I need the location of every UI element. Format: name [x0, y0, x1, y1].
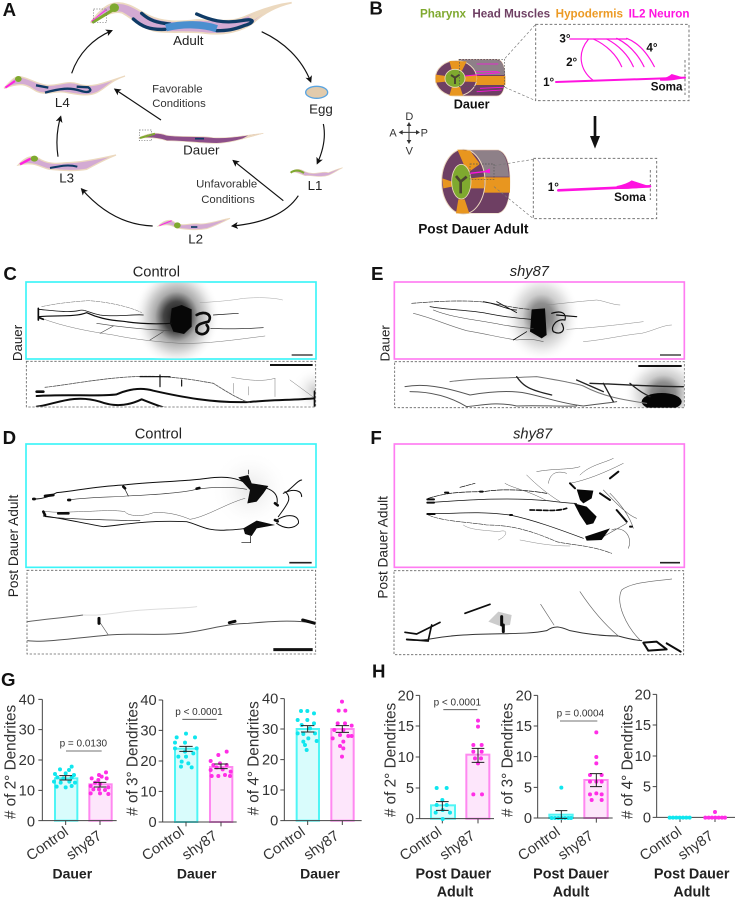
label: L2: L2: [188, 231, 203, 246]
legend: Hypodermis: [556, 8, 623, 21]
inset: dauer neuron: 4°: [646, 42, 658, 55]
label G: G: [1, 669, 16, 690]
worm: dauer: [138, 130, 263, 143]
chart: dauer 4° dendrites: Control: [260, 824, 308, 864]
heading: Control C: Control: [133, 265, 180, 281]
chart: dauer 2° dendrites: Control: [24, 824, 72, 864]
icon: dauer cylinder: [435, 59, 505, 96]
micrograph: control dauer: [25, 281, 317, 360]
chart: post dauer 4° dendrites: # of 4° Dendrites: [620, 704, 637, 819]
chart: dauer 2° dendrites: # of 2° Dendrites: [3, 704, 20, 819]
chart: dauer 2° dendrites: 40: [19, 692, 35, 708]
chart: post dauer 4° dendrites: [620, 687, 735, 899]
label: unfavorable conditions: Unfavorable: [196, 179, 257, 191]
label C: C: [3, 263, 17, 284]
chart: dauer 2° dendrites: 20: [19, 753, 35, 769]
chart: dauer 2° dendrites: 30: [19, 723, 35, 739]
inset: shy87 dauer: [394, 361, 685, 408]
chart: dauer 3° dendrites: p < 0.0001: [175, 707, 223, 718]
chart: dauer 3° dendrites: 40: [140, 693, 157, 709]
worm: L3: [18, 155, 116, 171]
chart: post dauer 3° dendrites: 0: [524, 811, 532, 827]
arrow: L2 to L3: [82, 189, 153, 226]
chart: post dauer 4° dendrites: shy87: [675, 828, 717, 864]
chart: dauer 4° dendrites: Dauer: [300, 866, 340, 882]
label E: E: [371, 263, 383, 284]
chart: post dauer 3° dendrites: p = 0.0004: [557, 709, 605, 720]
arrow: dauer to L4: [115, 89, 161, 120]
chart: post dauer 2° dendrites: # of 2° Dendrites: [382, 702, 399, 817]
label: Post Dauer Adult: Post Dauer Adult: [418, 222, 529, 237]
micrograph: control post dauer adult: [26, 444, 316, 567]
inset: post dauer neuron: 1°: [548, 181, 559, 194]
chart: post dauer 4° dendrites: Control: [637, 824, 685, 864]
inset: control post dauer adult: [27, 570, 316, 654]
chart: dauer 3° dendrites: 10: [140, 784, 157, 800]
panel H: post dauer adult charts: [372, 660, 735, 899]
arrow: L1 to L2: [232, 196, 298, 226]
label: L1: L1: [308, 178, 322, 193]
inset: dauer neuron: 2°: [566, 56, 578, 69]
chart: post dauer 2° dendrites: 20: [398, 688, 414, 704]
chart: post dauer 3° dendrites: [500, 688, 613, 899]
chart: dauer 3° dendrites: 30: [140, 723, 157, 739]
chart: dauer 3° dendrites: shy87: [179, 828, 221, 864]
icon: compass: D: [405, 111, 413, 123]
label: Adult: Adult: [173, 33, 204, 48]
icon: compass: A: [389, 127, 397, 139]
legend: [420, 8, 690, 21]
side label: Dauer C: Dauer: [10, 324, 25, 361]
side label: Post Dauer Adult F: Post Dauer Adult: [375, 496, 390, 599]
chart: dauer 4° dendrites: 10: [262, 783, 278, 799]
icon: egg: [306, 86, 328, 98]
panel G: dauer charts: [1, 669, 362, 882]
heading: shy87 E: shy87: [510, 264, 550, 280]
inset: dauer neuron: [536, 24, 689, 101]
chart: post dauer 4° dendrites: 5: [643, 780, 651, 796]
icon: post dauer cylinder: [442, 149, 510, 214]
chart: post dauer 3° dendrites: # of 3° Dendrites: [500, 702, 517, 817]
chart: post dauer 4° dendrites: 15: [635, 718, 651, 734]
panels C and D: control micrographs: [3, 263, 338, 448]
chart: post dauer 4° dendrites: 0: [643, 810, 651, 826]
chart: dauer 2° dendrites: [3, 692, 117, 882]
arrow: adult to egg: [262, 32, 311, 82]
icon: compass: V: [406, 145, 414, 157]
chart: post dauer 3° dendrites: 15: [516, 719, 532, 735]
chart: dauer 3° dendrites: Dauer: [177, 866, 217, 882]
label: L3: L3: [59, 171, 74, 186]
chart: dauer 3° dendrites: 20: [140, 754, 157, 770]
chart: post dauer 2° dendrites: Post Dauer: [416, 867, 492, 883]
inset: post dauer neuron: Soma: [614, 191, 646, 204]
chart: dauer 4° dendrites: shy87: [301, 828, 342, 864]
chart: dauer 2° dendrites: 10: [19, 783, 35, 799]
chart: post dauer 2° dendrites: 0: [406, 812, 414, 828]
chart: dauer 3° dendrites: # of 3° Dendrites: [124, 701, 141, 816]
label: L4: L4: [55, 95, 70, 110]
chart: post dauer 2° dendrites: Control: [397, 824, 445, 864]
label: favorable conditions: Conditions: [152, 98, 206, 110]
inset: post dauer neuron: [533, 158, 657, 219]
label: Dauer: Dauer: [454, 98, 490, 112]
legend: Head Muscles: [472, 8, 550, 21]
chart: dauer 4° dendrites: 0: [270, 814, 278, 830]
chart: dauer 4° dendrites: 40: [262, 692, 278, 708]
chart: dauer 4° dendrites: 30: [262, 722, 278, 738]
label H: H: [372, 660, 385, 681]
label: unfavorable conditions: Conditions: [201, 194, 255, 206]
chart: post dauer 2° dendrites: 5: [406, 781, 414, 797]
heading: shy87 F: shy87: [513, 426, 553, 442]
icon: compass: P: [421, 127, 428, 139]
label: favorable conditions: Favorable: [152, 83, 203, 95]
chart: post dauer 4° dendrites: 10: [635, 749, 651, 765]
chart: dauer 2° dendrites: p = 0.0130: [60, 738, 108, 749]
chart: post dauer 2° dendrites: 10: [398, 750, 414, 766]
chart: post dauer 4° dendrites: 20: [635, 687, 651, 703]
icon: compass: [389, 111, 428, 157]
inset: dauer neuron: 3°: [559, 32, 571, 45]
heading: Control D: Control: [135, 426, 182, 442]
label D: D: [3, 427, 16, 448]
chart: dauer 4° dendrites: 20: [262, 753, 278, 769]
chart: post dauer 2° dendrites: 15: [398, 719, 414, 735]
legend: IL2 Neuron: [629, 8, 690, 21]
label: Egg: Egg: [309, 101, 333, 116]
label: Dauer: Dauer: [183, 143, 220, 158]
inset: dauer neuron: Soma: [651, 81, 683, 94]
chart: post dauer 3° dendrites: 5: [524, 780, 532, 796]
micrograph: shy87 dauer: [394, 281, 686, 360]
arrow: L1 to dauer: [233, 161, 283, 201]
legend: Pharynx: [420, 8, 467, 21]
inset: dauer neuron: 1°: [543, 76, 555, 89]
chart: post dauer 3° dendrites: shy87: [555, 828, 597, 864]
chart: dauer 2° dendrites: 0: [27, 814, 35, 830]
chart: dauer 3° dendrites: Control: [139, 824, 187, 864]
arrow: dauer to post dauer adult: [590, 116, 600, 149]
zoom guide lines dauer: [505, 24, 536, 101]
chart: post dauer 4° dendrites: Post Dauer: [654, 867, 730, 883]
chart: dauer 4° dendrites: [246, 692, 362, 882]
label F: F: [370, 427, 382, 448]
panel A: life cycle: [3, 0, 343, 246]
chart: post dauer 3° dendrites: 20: [516, 688, 532, 704]
arrow: egg to L1: [317, 124, 324, 163]
worm: L2: [158, 218, 230, 230]
zoom guide lines post dauer: [494, 159, 536, 219]
chart: post dauer 2° dendrites: shy87: [437, 828, 478, 864]
arrow: L4 to adult: [72, 31, 112, 73]
worm: L1: [290, 168, 343, 176]
panels E and F: shy87 micrographs: [370, 263, 703, 448]
micrograph: shy87 post dauer adult: [394, 444, 684, 567]
chart: post dauer 3° dendrites: 10: [516, 750, 532, 766]
arrow: L3 to L4: [57, 117, 61, 157]
chart: dauer 3° dendrites: 0: [149, 815, 157, 831]
inset: control dauer: [26, 360, 316, 408]
side label: Dauer E: Dauer: [377, 325, 392, 361]
chart: dauer 2° dendrites: shy87: [64, 828, 105, 864]
chart: post dauer 2° dendrites: p < 0.0001: [434, 698, 482, 709]
side label: Post Dauer Adult D: Post Dauer Adult: [6, 495, 21, 597]
inset: shy87 post dauer adult: [394, 571, 684, 655]
chart: post dauer 3° dendrites: Post Dauer: [533, 867, 609, 883]
chart: dauer 3° dendrites: [124, 693, 237, 882]
chart: dauer 4° dendrites: # of 4° Dendrites: [246, 701, 263, 816]
worm: L4: [4, 76, 125, 95]
worm: adult: [91, 3, 292, 34]
chart: dauer 2° dendrites: Dauer: [53, 866, 93, 882]
chart: post dauer 2° dendrites: [382, 688, 494, 899]
chart: post dauer 3° dendrites: Control: [515, 824, 563, 864]
panel B: anatomy schematic: [369, 0, 690, 237]
